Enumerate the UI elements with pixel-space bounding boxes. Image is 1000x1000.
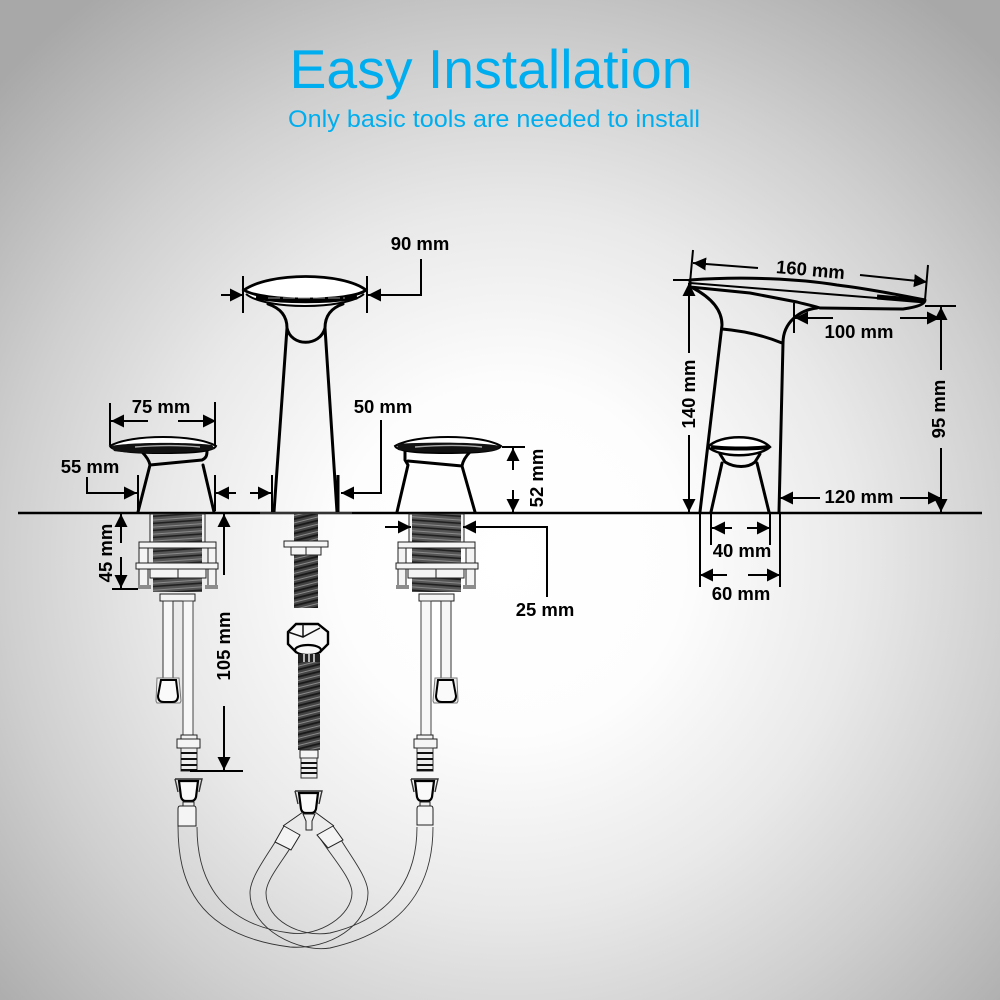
subtitle: Only basic tools are needed to install: [288, 106, 700, 133]
side view: handle: [708, 437, 770, 512]
front view: right handle: [395, 437, 501, 512]
dimension: 105 mm: 105 mm: [213, 612, 234, 680]
dimension: 60 mm: [700, 513, 780, 604]
right hose: [250, 827, 433, 949]
dimension: 75 mm: 75 mm: [132, 396, 190, 417]
dimension: 25 mm: 25 mm: [516, 599, 574, 620]
dimension: 55 mm: [61, 456, 138, 511]
dimension: 50 mm: 50 mm: [354, 396, 412, 417]
baseline: counter surface: [18, 512, 982, 514]
front view: centre spout: [244, 276, 366, 513]
dimension: 52 mm: [502, 447, 547, 512]
dimension: 160 mm: [673, 250, 928, 300]
left hose: [178, 826, 368, 947]
dimension: 160 mm: 160 mm: [775, 256, 846, 283]
centre swivel nut: [295, 791, 322, 813]
side collars: [183, 802, 430, 806]
dimension: 25 mm: [385, 527, 574, 620]
dimension: 60 mm: 60 mm: [712, 583, 770, 604]
front view: left handle: [110, 437, 216, 512]
dimension: 90 mm: [221, 233, 449, 313]
right swivel nut: [411, 779, 438, 801]
left swivel nut: [175, 779, 202, 801]
dimension: 50 mm: [338, 396, 412, 512]
dimension: 75 mm: [110, 396, 216, 445]
dimension: 95 mm: 95 mm: [928, 380, 949, 438]
dimension: 40 mm: 40 mm: [713, 540, 771, 561]
dimension: 120 mm: 120 mm: [825, 486, 893, 507]
left under-counter assembly: [136, 514, 218, 771]
dimension: 52 mm: 52 mm: [526, 449, 547, 507]
dimension: handle spacing: [215, 475, 272, 512]
dimension: 55 mm: 55 mm: [61, 456, 119, 477]
centre collar: [283, 812, 334, 830]
dimension: 45 mm: [95, 514, 138, 589]
title: Easy Installation: [290, 38, 692, 100]
right under-counter assembly: [396, 514, 478, 771]
dimension: 40 mm: [711, 513, 771, 561]
dimension: 45 mm: 45 mm: [95, 524, 116, 582]
dimension: 90 mm: 90 mm: [391, 233, 449, 254]
dimension: 100 mm: 100 mm: [825, 321, 893, 342]
hose sleeves: [178, 806, 433, 850]
dimension: 140 mm: 140 mm: [678, 360, 699, 428]
centre hex nut and hose tail: [288, 624, 328, 778]
side view: spout: [690, 278, 925, 512]
connectors and braided hoses: [175, 779, 438, 949]
centre threaded shank: [284, 514, 328, 608]
